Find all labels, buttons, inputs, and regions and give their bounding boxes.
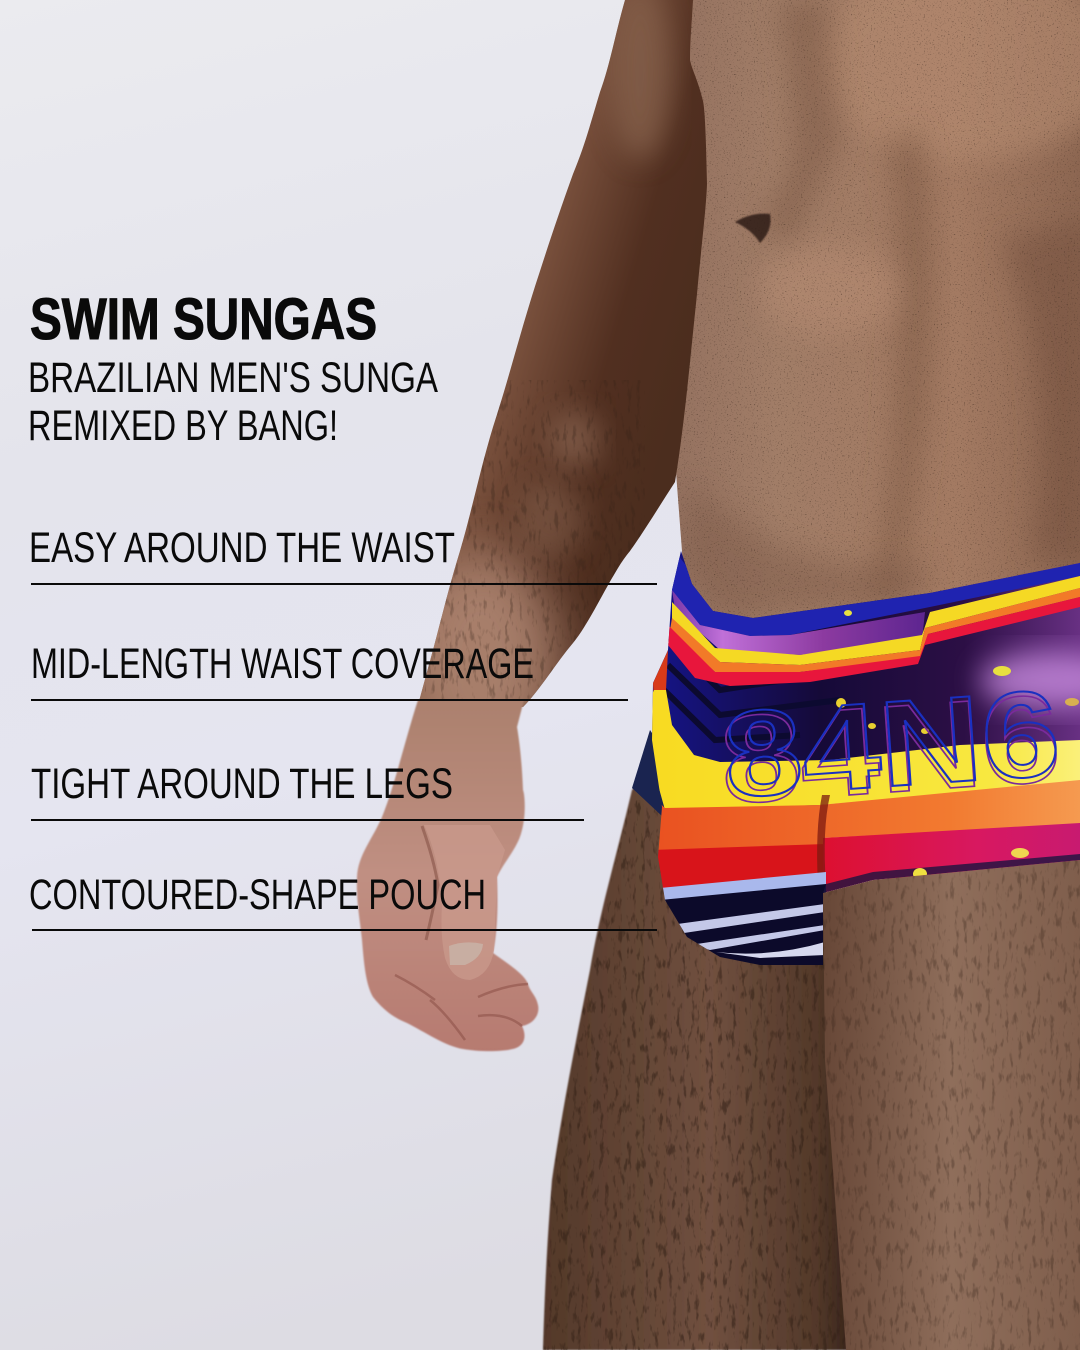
subtitle [28,354,438,450]
elbow patch [548,410,600,470]
feature: contoured-shape pouch: CONTOURED-SHAPE POUCH [29,871,486,919]
subtitle: BRAZILIAN MEN'S SUNGA [28,354,438,402]
logo: 84N6 [720,664,1064,823]
back panel [632,730,670,817]
feature: easy around the waist: EASY AROUND THE WAIST [29,524,455,572]
finger creases [395,975,528,1040]
upper arm highlight [608,0,672,160]
title: SWIM SUNGAS [30,287,377,352]
lower black and white stripes [660,884,826,970]
hand [357,700,538,1051]
yellow stripe [640,690,1080,810]
right leg [820,855,1080,1350]
thumbnail [449,942,483,965]
feature: mid-length waist coverage: MID-LENGTH WAIST COVERAGE [31,640,534,688]
waistband yellow [672,576,1080,665]
print base [640,540,1080,780]
waistband red [668,597,1080,686]
waistband orange [670,588,1080,672]
glow [980,652,1080,708]
navel [735,214,771,243]
waistband purple [672,590,925,655]
thumb [424,825,505,980]
forearm lightening [420,529,586,707]
spots [993,666,1011,676]
arm [420,0,707,707]
red side patch [653,650,668,691]
logo: 84N6 [716,669,1065,831]
hem shadow [823,854,1080,893]
orange stripe [645,780,1080,852]
magenta stripe right [823,823,1080,893]
navy stripes [664,640,850,740]
subtitle: REMIXED BY BANG! [28,402,338,450]
left leg [540,760,850,1350]
feature: tight around the legs: TIGHT AROUND THE LEGS [31,760,453,808]
periwinkle stripe [660,872,826,902]
torso [675,0,1080,640]
waistband blue [672,558,1080,636]
fold [817,795,830,873]
red stripe left [650,844,826,892]
swim sunga [632,540,1080,970]
